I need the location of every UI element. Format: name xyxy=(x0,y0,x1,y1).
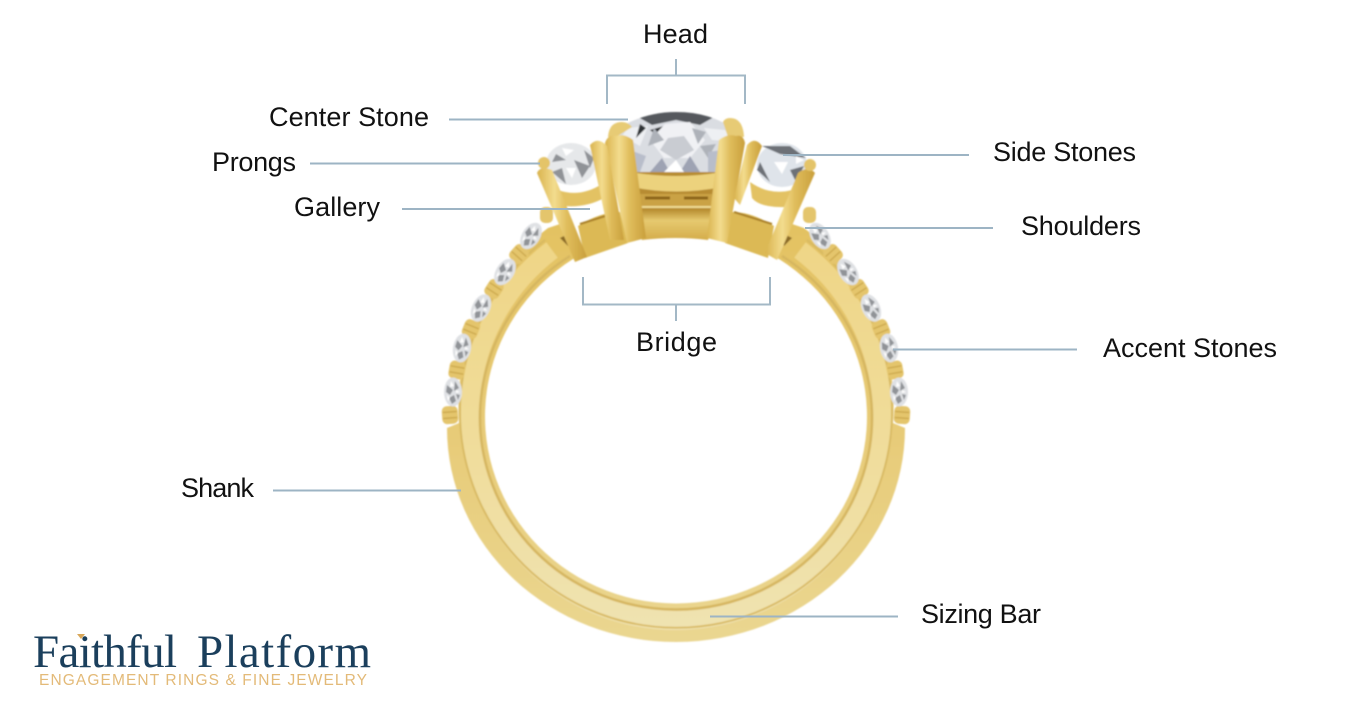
label: bridge: Bridge xyxy=(636,327,717,357)
label: head: Head xyxy=(643,19,708,49)
leader: shoulders xyxy=(805,227,993,229)
logo wordmark: Platform: Platform xyxy=(197,626,371,678)
leader: gallery xyxy=(402,208,590,210)
back prongs xyxy=(608,118,744,137)
leader: side stones xyxy=(783,154,969,156)
head bracket xyxy=(607,59,745,104)
label: gallery: Gallery xyxy=(294,192,380,222)
accent stone prongs xyxy=(441,207,911,425)
leader: center stone xyxy=(449,118,628,120)
center stone xyxy=(620,111,728,174)
bridge sections xyxy=(578,212,774,258)
right side stone prongs and cup xyxy=(734,141,816,260)
leader: sizing bar xyxy=(710,616,898,618)
left side stone prongs and cup xyxy=(537,141,624,262)
center prongs xyxy=(605,135,745,243)
logo wordmark: Faithful: Faithful xyxy=(33,626,177,678)
side stone left xyxy=(546,143,596,185)
side stone right xyxy=(757,143,807,187)
leader: accent stones xyxy=(893,348,1077,350)
shank groove lines xyxy=(460,232,892,628)
logo heart icon xyxy=(77,634,85,639)
gallery rail and dome xyxy=(630,172,722,240)
logo xyxy=(33,626,371,689)
leader: prongs xyxy=(310,162,540,164)
label: shoulders: Shoulders xyxy=(1021,211,1141,241)
label: shank: Shank xyxy=(181,473,254,503)
logo tagline: ENGAGEMENT RINGS & FINE JEWELRY xyxy=(39,672,367,689)
ring illustration xyxy=(441,111,911,642)
label: sizing bar: Sizing Bar xyxy=(921,599,1041,629)
leader: shank xyxy=(273,490,461,492)
shank: outer band xyxy=(447,222,905,642)
label: prongs: Prongs xyxy=(212,147,296,177)
accent stones xyxy=(444,219,908,406)
label: side stones: Side Stones xyxy=(993,137,1136,167)
label: center stone: Center Stone xyxy=(269,102,429,132)
bridge bracket xyxy=(583,277,770,321)
sizing bar: inner lighter band xyxy=(470,250,882,620)
label: accent stones: Accent Stones xyxy=(1103,333,1277,363)
